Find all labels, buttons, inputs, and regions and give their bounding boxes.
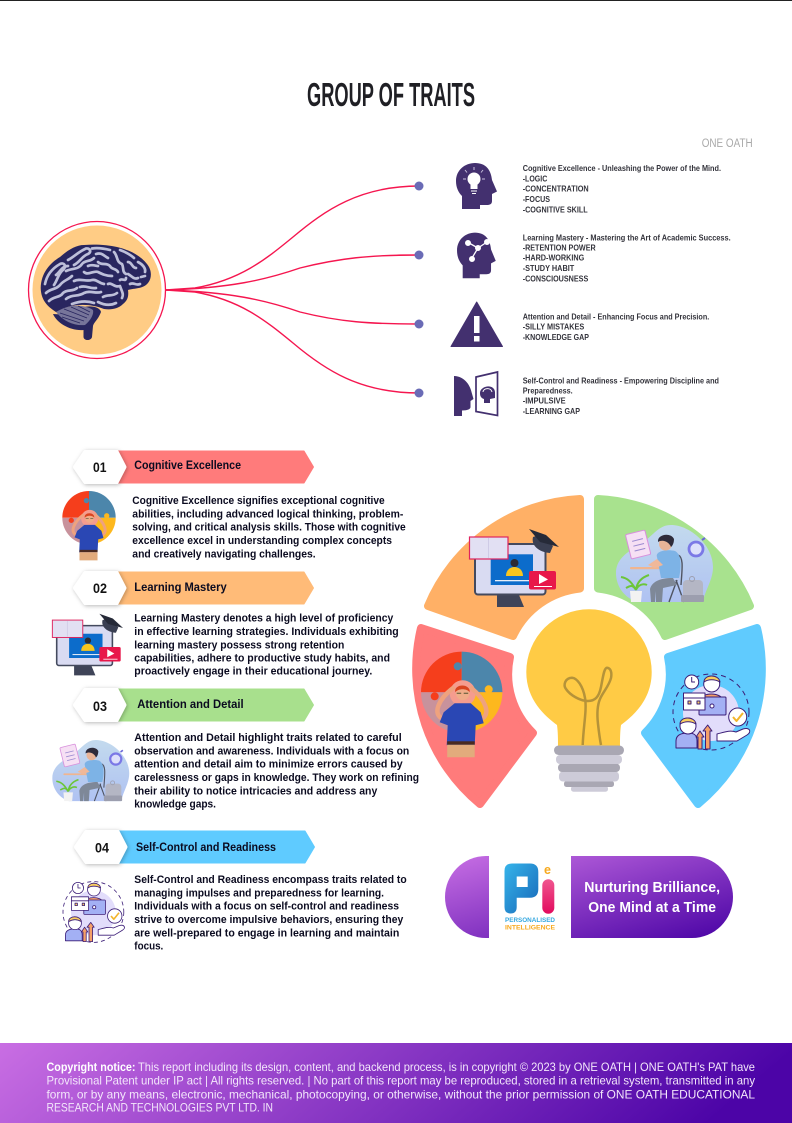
petal: self-control and readiness xyxy=(645,628,762,804)
paragraph: learning mastery xyxy=(134,613,399,678)
paragraph: attention and detail: attention and detail aim to minimize errors caused by xyxy=(134,759,404,771)
banner 03: attention and detail xyxy=(74,689,314,721)
paragraph: self-control and readiness: Self-Control and Readiness encompass traits related to xyxy=(134,874,407,886)
banner 04: self-control and readiness: Self-Control and Readiness xyxy=(136,842,276,854)
paragraph: learning mastery: proactively engage in their educational journey. xyxy=(134,666,372,678)
paragraph: cognitive excellence xyxy=(132,495,406,560)
paragraph: attention and detail: observation and awareness. Individuals with a focus on xyxy=(134,745,410,757)
trait list: self-control and readiness: Preparedness. xyxy=(523,387,573,396)
paragraph: self-control and readiness: Individuals with a focus on self-control and readiness xyxy=(134,901,399,913)
paragraph: cognitive excellence: and creatively navigating challenges. xyxy=(132,548,316,560)
copyright notice: This report including its design, content, and backend process, is in copyright © 2023 by ONE OATH | ONE OATH's PAT have xyxy=(138,1061,755,1074)
banner 01: cognitive excellence: Cognitive Excellence xyxy=(134,460,241,472)
trait list: cognitive excellence: -COGNITIVE SKILL xyxy=(523,205,588,214)
trait list: cognitive excellence: Cognitive Excellence - Unleashing the Power of the Mind. xyxy=(523,164,721,173)
trait list: attention and detail: -SILLY MISTAKES xyxy=(523,323,585,332)
paragraph: cognitive excellence: abilities, including advanced logical thinking, problem- xyxy=(132,508,404,520)
paragraph: cognitive excellence: solving, and critical analysis skills. Those with cognitive xyxy=(132,522,406,534)
logo: personalised intelligence xyxy=(504,863,555,932)
paragraph: learning mastery: learning mastery possess strong retention xyxy=(134,639,345,651)
trait list: attention and detail: Attention and Detail - Enhancing Focus and Precision. xyxy=(523,312,709,321)
logo: personalised intelligence: e xyxy=(544,863,551,877)
trait list: learning mastery: -HARD-WORKING xyxy=(523,254,584,263)
banner 02: learning mastery: 02 xyxy=(93,581,107,596)
petal: attention and detail xyxy=(598,499,750,636)
logo: personalised intelligence: PERSONALISED xyxy=(505,917,555,924)
monitor illustration: large xyxy=(470,529,559,607)
trait list: cognitive excellence: -LOGIC xyxy=(523,174,547,183)
paragraph: learning mastery: Learning Mastery denotes a high level of proficiency xyxy=(134,613,394,625)
icon: head facing mirror xyxy=(454,372,498,416)
paragraph: learning mastery: capabilities, adhere to productive study habits, and xyxy=(134,652,390,664)
paragraph: attention and detail: knowledge gaps. xyxy=(134,799,216,811)
paragraph: attention and detail: their ability to notice intricacies and address any xyxy=(134,785,378,797)
paragraph: self-control and readiness: focus. xyxy=(134,941,163,953)
paragraph: attention and detail: carelessness or gaps in knowledge. They work on refining xyxy=(134,772,419,784)
trait list: cognitive excellence: -CONCENTRATION xyxy=(523,185,589,194)
people illustration: large xyxy=(673,674,750,750)
icon: brain xyxy=(41,245,151,340)
copyright notice: Provisional Patent under IP act | All rights reserved. | No part of this report may be reproduced, stored in a retrieval system, transmitted in any xyxy=(46,1075,755,1088)
icon: head with lightbulb xyxy=(456,163,497,209)
paragraph: self-control and readiness: managing impulses and preparedness for learning. xyxy=(134,887,384,899)
tagline banner: Nurturing Brilliance, xyxy=(584,880,720,896)
paragraph: learning mastery: in effective learning strategies. Individuals exhibiting xyxy=(134,626,399,638)
copyright notice: form, or by any means, electronic, mechanical, photocopying, or otherwise, without the prior permission of ONE OATH EDUCATIONAL xyxy=(46,1088,756,1101)
trait list: learning mastery: -STUDY HABIT xyxy=(523,264,574,273)
puzzle illustration: small xyxy=(62,491,116,560)
petal: cognitive excellence xyxy=(416,628,533,804)
banner 01: cognitive excellence xyxy=(74,451,314,483)
icon: warning triangle xyxy=(451,302,502,346)
monitor illustration: small xyxy=(52,614,123,675)
trait list: self-control and readiness xyxy=(523,376,719,416)
connector curves xyxy=(166,182,424,398)
tagline banner xyxy=(445,850,733,942)
central light bulb xyxy=(526,609,652,792)
copyright notice xyxy=(46,1061,756,1115)
banner 03: attention and detail: 03 xyxy=(93,699,107,714)
paragraph: attention and detail: Attention and Detail highlight traits related to careful xyxy=(134,732,402,744)
brand label: ONE OATH xyxy=(702,138,753,150)
student illustration: large xyxy=(616,525,713,602)
banner 04: self-control and readiness: 04 xyxy=(95,840,109,856)
footer copyright band xyxy=(0,1043,792,1123)
trait list: learning mastery: Learning Mastery - Mastering the Art of Academic Success. xyxy=(523,233,731,242)
tagline banner: One Mind at a Time xyxy=(588,900,716,916)
trait list: cognitive excellence: -FOCUS xyxy=(523,195,551,204)
student illustration: small xyxy=(52,740,129,801)
trait list: attention and detail xyxy=(523,312,709,342)
trait list: self-control and readiness: -LEARNING GAP xyxy=(523,407,581,416)
puzzle illustration: large xyxy=(421,652,502,757)
trait list: learning mastery: -CONSCIOUSNESS xyxy=(523,274,589,283)
copyright notice: RESEARCH AND TECHNOLOGIES PVT LTD. IN xyxy=(46,1102,273,1115)
paragraph: self-control and readiness: strive to overcome impulsive behaviors, ensuring they xyxy=(134,914,404,926)
people illustration: small xyxy=(63,882,124,942)
logo: personalised intelligence: INTELLIGENCE xyxy=(505,924,555,932)
petal: learning mastery xyxy=(428,499,580,636)
trait list: self-control and readiness: -IMPULSIVE xyxy=(523,397,566,406)
banner 02: learning mastery: Learning Mastery xyxy=(134,582,227,594)
banner 01: cognitive excellence: 01 xyxy=(93,460,107,475)
brain hub xyxy=(28,222,166,358)
trait list: self-control and readiness: Self-Control and Readiness - Empowering Discipline and xyxy=(523,376,719,385)
paragraph: cognitive excellence: excellence excel in understanding complex concepts xyxy=(132,535,392,547)
banner 03: attention and detail: Attention and Detail xyxy=(137,699,244,711)
trait list: cognitive excellence xyxy=(523,164,721,214)
title: GROUP OF TRAITS xyxy=(307,76,475,113)
paragraph: self-control and readiness: are well-prepared to engage in learning and maintain xyxy=(134,927,400,939)
paragraph: self-control and readiness xyxy=(134,874,407,953)
copyright notice: Copyright notice: xyxy=(46,1061,136,1074)
trait list: learning mastery xyxy=(523,233,731,283)
trait list: learning mastery: -RETENTION POWER xyxy=(523,243,596,252)
banner 02: learning mastery xyxy=(74,572,314,604)
paragraph: cognitive excellence: Cognitive Excellence signifies exceptional cognitive xyxy=(132,495,385,507)
trait list: attention and detail: -KNOWLEDGE GAP xyxy=(523,333,590,342)
banner 04: self-control and readiness xyxy=(76,831,314,863)
paragraph: attention and detail xyxy=(134,732,419,811)
icon: head with network xyxy=(457,233,496,278)
